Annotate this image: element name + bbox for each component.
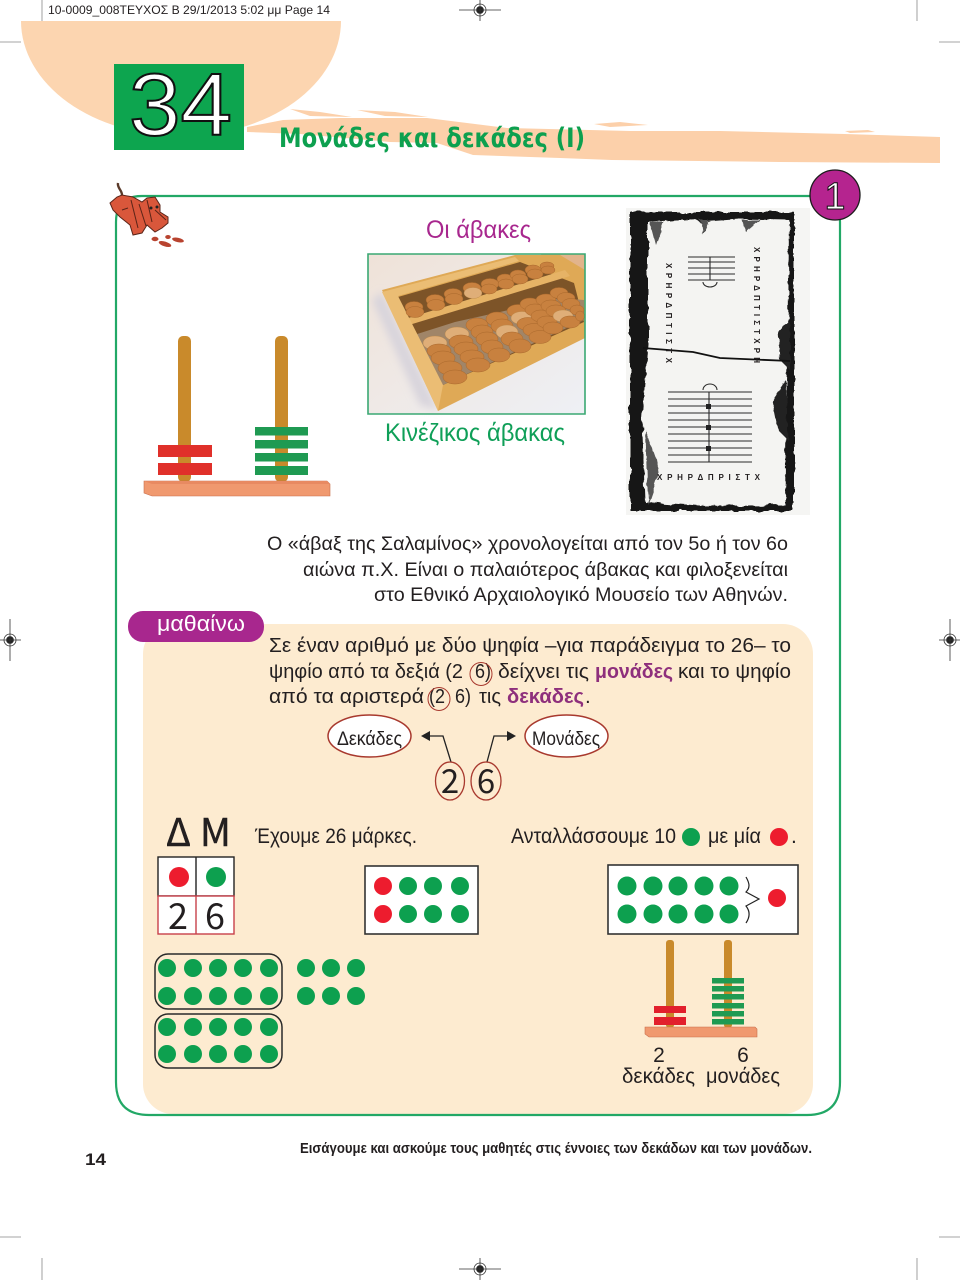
header decoration: peach brush stroke	[247, 109, 940, 163]
text block: explanation of digits: τις	[479, 685, 501, 708]
heading: abaci: Οι άβακες	[426, 216, 531, 244]
callout: units oval	[525, 715, 608, 757]
text block: explanation of digits: 6)	[475, 660, 491, 683]
illustration: two-rod abacus	[144, 336, 330, 496]
section number badge	[810, 170, 860, 220]
arrow: six to units	[487, 731, 516, 762]
photo: chinese abacus	[368, 254, 585, 414]
text block: explanation of digits: .	[585, 685, 591, 708]
arrow: two to tens	[421, 731, 451, 762]
callout: units oval: Μονάδες	[532, 729, 600, 750]
number 26 with ovals: 2	[441, 755, 459, 803]
text block: explanation of digits: δείχνει τις	[498, 660, 589, 683]
label: learning tab: μαθαίνω	[157, 611, 245, 636]
text: we have 26 stamps: Έχουμε 26 μάρκες.	[254, 825, 417, 848]
caption: chinese abacus: Κινέζικος άβακας	[385, 419, 565, 447]
counters: 26 grouped green dots	[155, 954, 365, 1068]
text block: explanation of digits: από τα αριστερά	[269, 685, 424, 708]
page number: 14	[85, 1150, 107, 1169]
labels: 2 tens 6 units: 2	[653, 1044, 665, 1067]
green page frame	[116, 196, 840, 1115]
icon: red dog mascot	[110, 183, 184, 248]
footer note: Εισάγουμε και ασκούμε τους μαθητές στις έννοιες των δεκάδων και των μονάδων.	[300, 1140, 812, 1157]
header decoration: peach bowl	[21, 21, 341, 136]
place value table: 6	[205, 888, 225, 940]
panel: cream learning panel	[143, 624, 813, 1114]
text block: explanation of digits	[269, 634, 791, 710]
place value table: Μ	[200, 802, 231, 857]
text block: salamis tablet description	[267, 534, 788, 606]
text: exchange 10 green for one red: .	[791, 825, 797, 848]
title: Μονάδες και δεκάδες (Ι)	[279, 123, 585, 154]
text block: salamis tablet description: στο Εθνικό Αρχαιολογικό Μουσείο των Αθηνών.	[374, 585, 788, 606]
text block: explanation of digits: (2	[429, 685, 445, 708]
box: ten green equal one red	[608, 865, 798, 934]
text block: explanation of digits: και το ψηφίο	[678, 660, 791, 683]
illustration: abacus showing 26	[645, 940, 757, 1037]
text block: explanation of digits: 6)	[455, 685, 471, 708]
labels: 2 tens 6 units: 6	[737, 1044, 749, 1067]
photo: salamis tablet: Χ Ρ Η Ρ Δ Π Τ Ι Σ Τ Χ	[664, 263, 673, 364]
place value table	[158, 802, 234, 940]
registration mark: right	[939, 619, 960, 661]
number 26 with ovals: 6	[477, 755, 495, 803]
text block: explanation of digits: Σε έναν αριθμό με δύο ψηφία –για παράδειγμα το 26– το	[269, 634, 791, 657]
text block: explanation of digits: ψηφίο από τα δεξιά (2	[269, 660, 463, 683]
place value table: 2	[168, 888, 188, 940]
registration mark: top	[459, 0, 501, 21]
photo: salamis tablet: Χ Ρ Η Ρ Δ Π Ρ Ι Σ Τ Χ	[657, 473, 761, 482]
photo: salamis tablet: Χ Ρ Η Ρ Δ Π Τ Ι Σ Τ Χ Ρ Η	[752, 247, 761, 363]
box: 2 red and 6 green counters	[365, 866, 478, 934]
place value table: Δ	[166, 802, 191, 857]
labels: 2 tens 6 units: δεκάδες	[622, 1065, 695, 1088]
text block: salamis tablet description: Ο «άβαξ της Σαλαμίνος» χρονολογείται από τον 5ο ή τον 6ο	[267, 534, 788, 555]
callout: tens oval: Δεκάδες	[337, 729, 402, 750]
number 26 with ovals	[436, 755, 501, 803]
registration mark: left	[0, 619, 21, 661]
printer slug line: 10-0009_008ΤΕΥΧΟΣ Β 29/1/2013 5:02 μμ Page 14	[48, 3, 330, 17]
labels: 2 tens 6 units: μονάδες	[706, 1065, 780, 1088]
callout: tens oval	[328, 715, 411, 757]
labels: 2 tens 6 units	[622, 1044, 780, 1088]
lesson number badge: 34	[129, 55, 232, 154]
label: learning tab	[128, 611, 264, 642]
text block: explanation of digits: δεκάδες	[507, 685, 584, 708]
photo: salamis tablet	[626, 208, 810, 515]
text block: salamis tablet description: αιώνα π.Χ. Είναι ο παλαιότερος άβακας και φιλοξενείται	[303, 560, 788, 581]
registration mark: bottom	[459, 1258, 501, 1280]
text: exchange 10 green for one red: Ανταλλάσσουμε 10	[511, 825, 676, 848]
section number badge: 1	[824, 176, 846, 218]
text: exchange 10 green for one red: με μία	[708, 825, 761, 848]
text block: explanation of digits: μονάδες	[595, 660, 673, 683]
text: exchange 10 green for one red	[511, 825, 797, 848]
